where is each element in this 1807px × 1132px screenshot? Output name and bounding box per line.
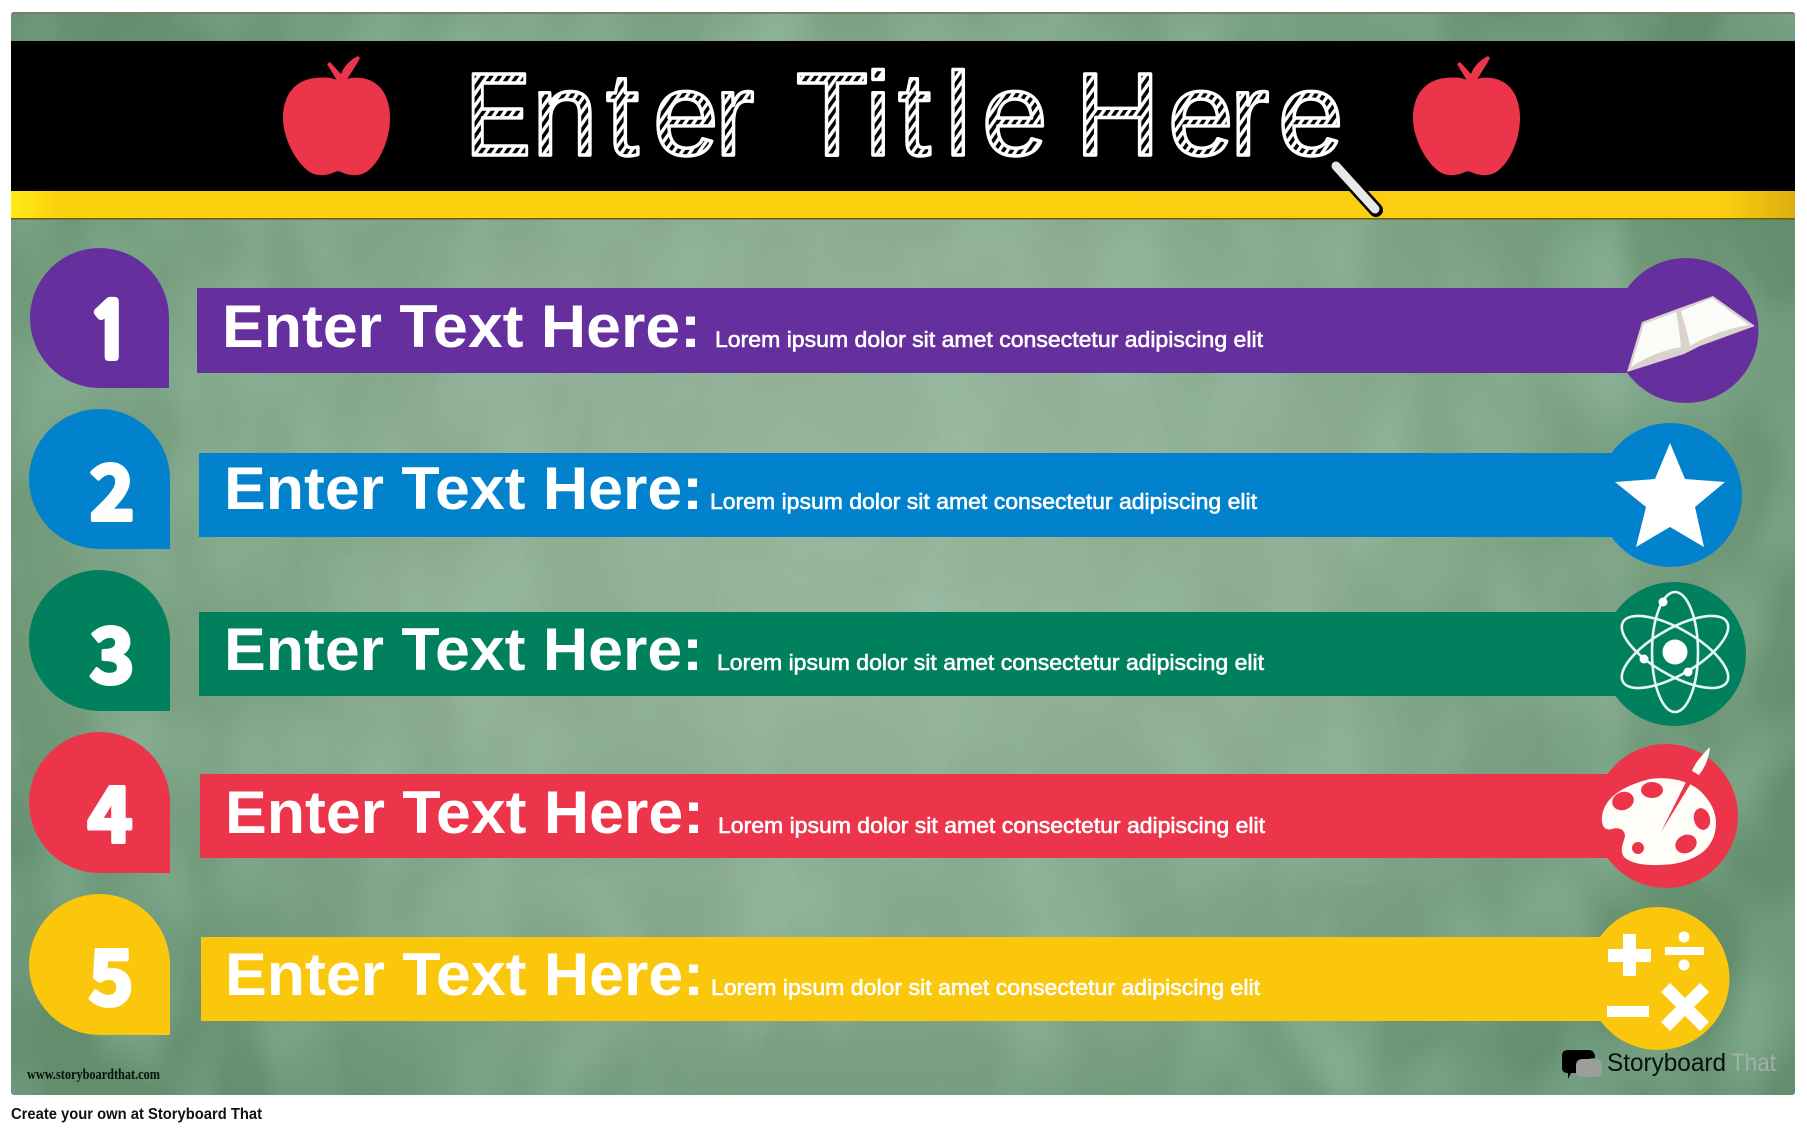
logo: Storyboard That [1562, 1049, 1776, 1079]
number badge 2: 2 [90, 432, 134, 542]
number badge 3 [29, 570, 170, 711]
bar 1 [197, 258, 1758, 403]
icon: star [1615, 443, 1725, 547]
number badge 4 [29, 732, 170, 873]
number badge 5 [29, 894, 170, 1035]
bar 5: Lorem ipsum dolor sit amet consectetur adipiscing elit [711, 975, 1260, 1000]
bar 4: Enter Text Here: [225, 779, 704, 846]
logo: Storyboard That: That [1731, 1049, 1776, 1077]
title banner [11, 41, 1795, 220]
row 1 [30, 248, 1758, 403]
bar 1: Lorem ipsum dolor sit amet consectetur adipiscing elit [715, 327, 1263, 352]
icon: book [1627, 296, 1755, 372]
bar 4: Lorem ipsum dolor sit amet consectetur adipiscing elit [718, 813, 1265, 838]
bar 2: Lorem ipsum dolor sit amet consectetur adipiscing elit [710, 489, 1257, 514]
icon: atom [1612, 592, 1738, 712]
website url: www.storyboardthat.com [27, 1067, 160, 1083]
bar 5: Enter Text Here: [225, 941, 704, 1008]
bar 3: Lorem ipsum dolor sit amet consectetur adipiscing elit [717, 650, 1264, 675]
caption: Create your own at Storyboard That [11, 1106, 263, 1123]
row 5 [29, 894, 1730, 1050]
row 4 [29, 732, 1738, 888]
title: E [465, 49, 531, 181]
number badge 3: 3 [90, 595, 134, 705]
number badge 5: 5 [89, 917, 133, 1027]
bar 2: Enter Text Here: [224, 455, 703, 522]
icon: chalk [1336, 166, 1376, 210]
icon: right apple [1413, 56, 1520, 175]
bar 2 [199, 423, 1742, 567]
icon: palette [1602, 747, 1716, 865]
icon: left apple [283, 56, 390, 175]
icon: math symbols [1607, 932, 1709, 1031]
number badge 4: 4 [88, 754, 132, 864]
bar 3: Enter Text Here: [224, 616, 703, 683]
bar 4 [200, 744, 1738, 888]
number badge 1: 1 [87, 295, 133, 370]
logo: Storyboard That: Storyboard [1607, 1049, 1726, 1077]
row 2 [29, 409, 1742, 567]
bar 5 [201, 907, 1730, 1050]
row 3 [29, 570, 1746, 726]
bar 1: Enter Text Here: [222, 293, 701, 360]
number badge 2 [29, 409, 170, 549]
title: nter Title Here [532, 49, 1344, 181]
number badge 1 [30, 248, 169, 388]
bar 3 [199, 582, 1746, 726]
